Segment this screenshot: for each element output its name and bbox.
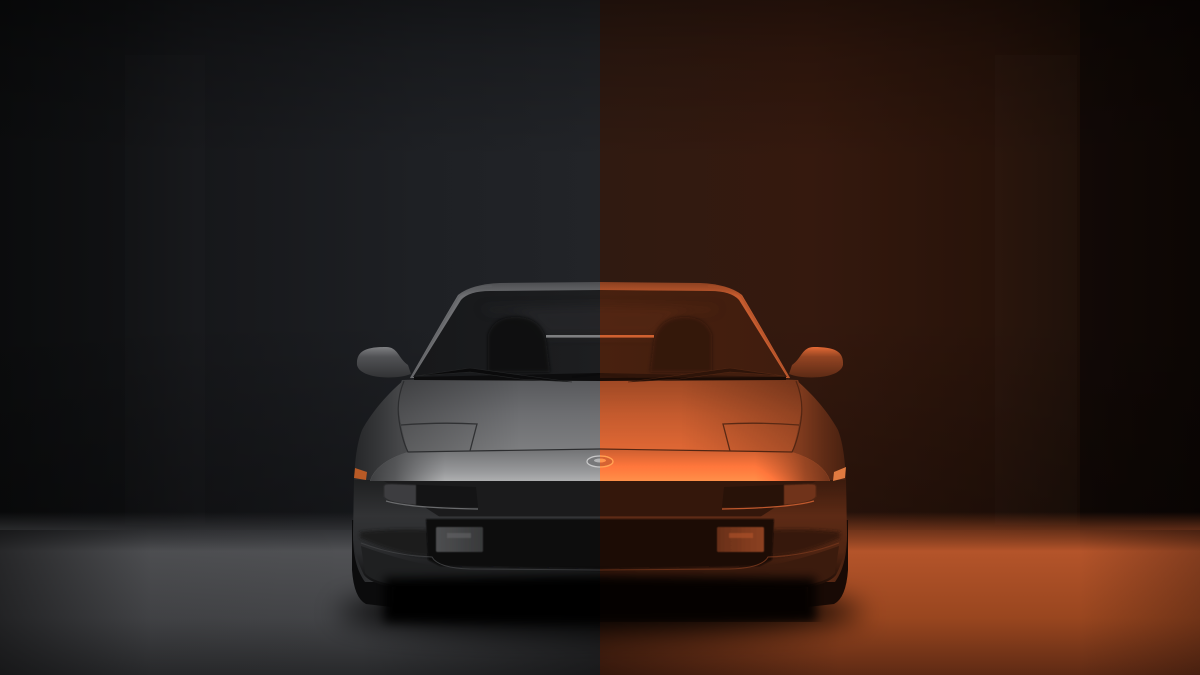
floor: right orange pool xyxy=(600,512,1200,675)
car: left grey half xyxy=(352,282,600,626)
background: right orange wall xyxy=(600,0,1200,675)
car ground shadow xyxy=(338,592,862,632)
windshield: right warm tint xyxy=(600,290,787,378)
floor base right xyxy=(600,512,1200,675)
wall shade xyxy=(0,0,1200,530)
wall panel: left pillar xyxy=(125,55,205,525)
floor: left grey pool xyxy=(0,512,600,675)
floor base left xyxy=(0,512,600,675)
background: left grey wall xyxy=(0,0,600,675)
car: right orange half xyxy=(600,282,848,622)
floor side fade left xyxy=(0,530,600,675)
wall panel: right pillar xyxy=(995,55,1077,525)
side marker: right amber xyxy=(833,467,846,481)
floor side fade right xyxy=(600,530,1200,675)
side marker: left amber xyxy=(354,468,367,480)
